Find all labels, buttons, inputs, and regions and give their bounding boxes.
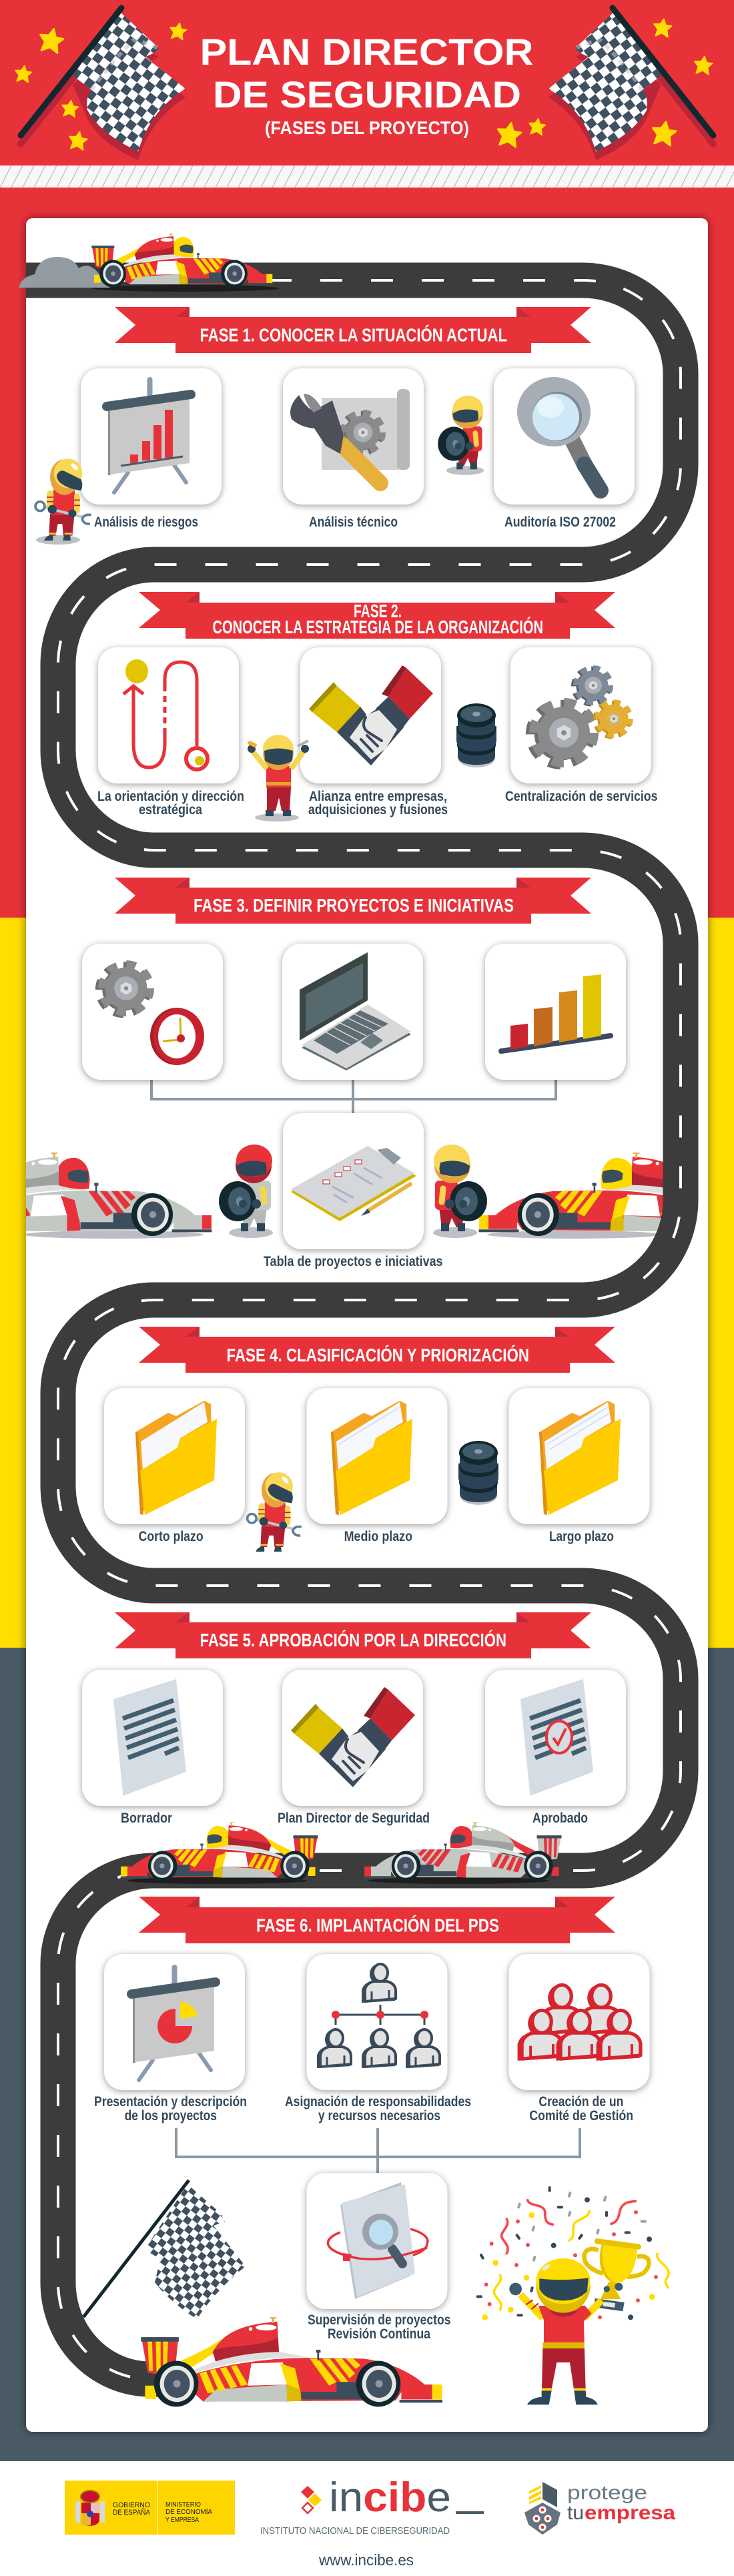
tyre stack xyxy=(456,703,496,767)
panel: fase 3 xyxy=(82,878,626,1269)
card: presentación xyxy=(104,1954,245,2090)
label: comité: Comité de Gestión xyxy=(529,2108,633,2124)
tyre stack xyxy=(458,1441,498,1505)
label: alianza: adquisiciones y fusiones xyxy=(308,801,448,818)
website: www.incibe.es xyxy=(318,2551,414,2569)
label: corto plazo: Corto plazo xyxy=(139,1528,204,1544)
logo: incibe xyxy=(260,2475,484,2537)
banner fase 1: FASE 1. CONOCER LA SITUACIÓN ACTUAL xyxy=(200,324,507,346)
finish flag xyxy=(83,2180,246,2319)
banner fase 6 xyxy=(139,1897,615,1943)
main white panel xyxy=(26,218,708,2432)
label: orientación xyxy=(97,788,244,818)
banner fase 2 xyxy=(139,592,615,639)
banner fase 5 xyxy=(115,1612,591,1658)
banner fase 2: FASE 2. xyxy=(354,601,402,621)
logo: incibe: incibe xyxy=(329,2475,451,2521)
label: auditoría: Auditoría ISO 27002 xyxy=(504,514,616,530)
logo: incibe: INSTITUTO NACIONAL DE CIBERSEGURIDAD xyxy=(260,2525,450,2537)
mechanic yellow helmet with tyre xyxy=(433,1145,487,1238)
finish car xyxy=(141,2317,442,2406)
label: comité xyxy=(529,2094,633,2124)
card: análisis de riesgos xyxy=(81,368,222,505)
logo: gobierno de españa: DE ECONOMÍA xyxy=(165,2507,212,2516)
panel: fase 6 xyxy=(83,1897,669,2406)
header: stars xyxy=(14,18,713,151)
title: DE SEGURIDAD xyxy=(213,73,521,115)
mechanic with wrench xyxy=(248,1472,302,1552)
card: orientación estratégica xyxy=(98,647,239,783)
mechanic with tyre xyxy=(438,396,484,475)
label: presentación xyxy=(94,2094,247,2124)
label: borrador: Borrador xyxy=(121,1810,173,1826)
mechanic with wrench xyxy=(35,458,91,545)
label: plan director de seguridad: Plan Director de Seguridad xyxy=(278,1810,430,1826)
logo: gobierno de españa: DE ESPAÑA xyxy=(113,2508,151,2517)
card: plan director xyxy=(282,1670,423,1806)
card: aprobado xyxy=(485,1670,626,1806)
title xyxy=(200,31,534,138)
logo: protege tu empresa: empresa xyxy=(585,2502,675,2524)
card: largo plazo xyxy=(508,1388,650,1524)
title: (FASES DEL PROYECTO) xyxy=(265,117,469,138)
racing car grey xyxy=(364,1823,562,1884)
hatched stripe band xyxy=(0,166,734,188)
race track xyxy=(26,280,681,2379)
label: orientación: La orientación y dirección xyxy=(97,788,244,804)
title: PLAN DIRECTOR xyxy=(200,31,534,73)
start car with smoke cloud xyxy=(19,234,279,292)
label: supervisión: Revisión Continua xyxy=(328,2326,431,2342)
banner fase 2: CONOCER LA ESTRATEGIA DE LA ORGANIZACIÓN xyxy=(212,617,543,637)
label: asignación xyxy=(285,2094,471,2124)
label: análisis técnico: Análisis técnico xyxy=(309,514,398,530)
card: engranaje y reloj xyxy=(82,944,223,1080)
panel: fase 1 xyxy=(35,307,635,545)
pit cars behind road, fase 3 xyxy=(0,1153,734,1239)
label: asignación: y recursos necesarios xyxy=(318,2108,440,2124)
card: corto plazo xyxy=(104,1388,245,1524)
mechanic red helmet with tyre xyxy=(219,1145,273,1238)
banner fase 5: FASE 5. APROBACIÓN POR LA DIRECCIÓN xyxy=(200,1630,506,1650)
connector lines xyxy=(151,1080,556,1113)
panel: fase 4 xyxy=(104,1327,650,1552)
card: tabla de proyectos xyxy=(283,1113,424,1249)
card: centralización xyxy=(510,647,651,783)
logo: gobierno de españa: GOBIERNO xyxy=(113,2501,150,2509)
card: medio plazo xyxy=(307,1388,447,1524)
card: supervisión xyxy=(307,2173,447,2309)
banner fase 4 xyxy=(139,1327,615,1373)
banner fase 3 xyxy=(115,878,591,924)
card: portátil xyxy=(282,944,423,1080)
card: análisis técnico xyxy=(283,368,424,505)
header: left checkered flag xyxy=(21,8,186,160)
banner fase 3: FASE 3. DEFINIR PROYECTOS E INICIATIVAS xyxy=(194,895,514,916)
card: auditoría ISO 27002 xyxy=(494,368,635,505)
label: comité: Creación de un xyxy=(538,2094,623,2110)
label: largo plazo: Largo plazo xyxy=(549,1528,614,1544)
label: orientación: estratégica xyxy=(139,801,203,818)
label: tabla de proyectos: Tabla de proyectos e iniciativas xyxy=(264,1253,443,1269)
label: presentación: de los proyectos xyxy=(125,2108,217,2124)
coat of arms xyxy=(75,2491,105,2526)
card: gráfico de barras xyxy=(485,944,626,1080)
label: centralización: Centralización de servicios xyxy=(505,788,658,804)
label: análisis de riesgos: Análisis de riesgos xyxy=(94,514,198,530)
card: asignación xyxy=(307,1954,447,2090)
label: supervisión: Supervisión de proyectos xyxy=(308,2312,451,2328)
header: right checkered flag xyxy=(548,8,713,160)
logo: gobierno de españa xyxy=(65,2481,235,2535)
panel: fase 5 xyxy=(82,1612,626,1884)
card: alianza xyxy=(300,647,441,783)
winner with trophy and confetti xyxy=(478,2188,669,2404)
label: supervisión xyxy=(308,2312,451,2342)
mechanic celebrating with tools xyxy=(248,735,309,822)
connector lines xyxy=(176,2128,580,2173)
label: medio plazo: Medio plazo xyxy=(344,1528,412,1544)
banner fase 4: FASE 4. CLASIFICACIÓN Y PRIORIZACIÓN xyxy=(227,1345,529,1365)
footer xyxy=(65,2475,675,2569)
label: asignación: Asignación de responsabilidades xyxy=(285,2094,471,2110)
logo: protege tu empresa: tu xyxy=(567,2502,584,2524)
logo: protege tu empresa xyxy=(524,2482,675,2535)
logo: gobierno de españa: Y EMPRESA xyxy=(165,2517,199,2524)
card: borrador xyxy=(82,1670,223,1806)
label: alianza xyxy=(308,788,448,818)
label: presentación: Presentación y descripción xyxy=(94,2094,247,2110)
panel: fase 2 xyxy=(97,592,658,822)
banner fase 1 xyxy=(115,307,591,353)
label: alianza: Alianza entre empresas, xyxy=(309,788,447,804)
label: aprobado: Aprobado xyxy=(532,1810,588,1826)
logo: protege tu empresa: protege xyxy=(567,2482,647,2504)
racing car yellow xyxy=(121,1823,318,1884)
card: comité xyxy=(508,1954,650,2090)
logo: gobierno de españa: MINISTERIO xyxy=(165,2501,201,2509)
banner fase 6: FASE 6. IMPLANTACIÓN DEL PDS xyxy=(256,1915,499,1935)
